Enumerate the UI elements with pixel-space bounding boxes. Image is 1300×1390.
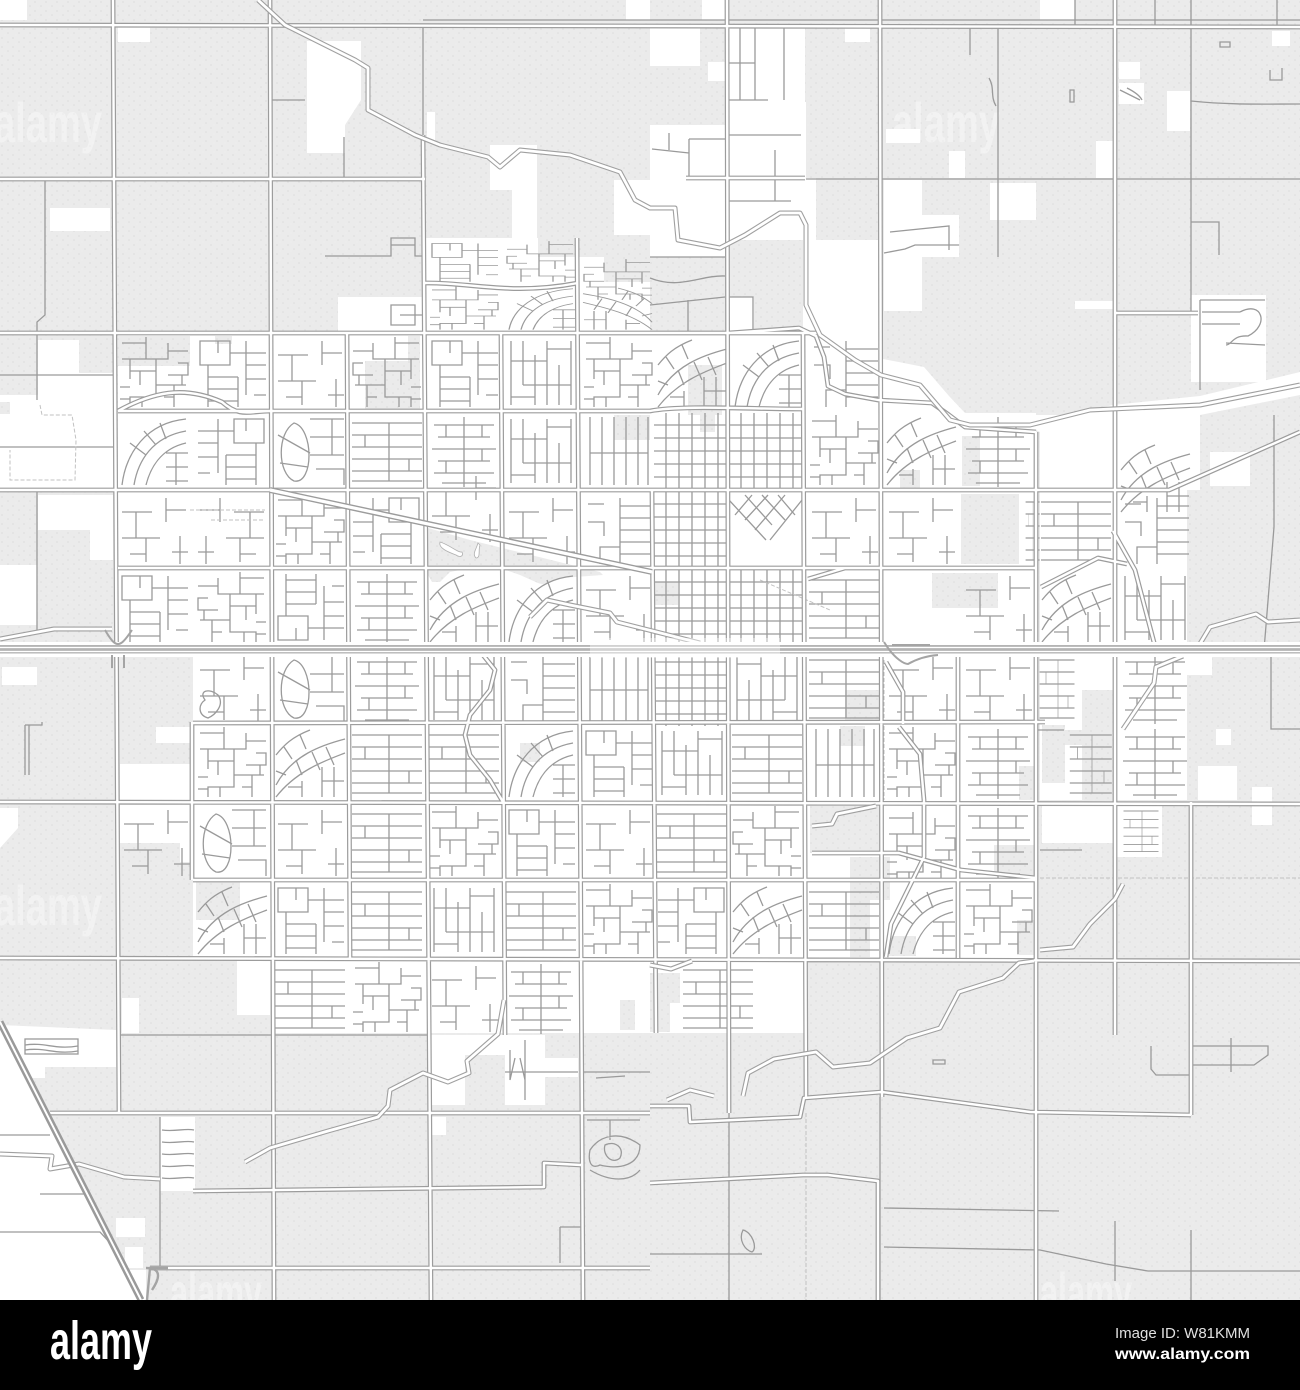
city street rows: [120, 337, 1190, 1034]
footer bar: [0, 1300, 1300, 1390]
railway diagonal: [270, 490, 652, 572]
watermarks: [0, 91, 1132, 1324]
freeway: [0, 630, 1300, 668]
website: www.alamy.com: [1114, 1346, 1250, 1363]
watermarks: alamy: [892, 91, 1000, 154]
south-west highway: [0, 1022, 168, 1300]
downtown diamond grid: [729, 495, 802, 540]
logo: alamy: alamy: [50, 1311, 152, 1371]
upper neighbourhood blocks: [430, 241, 652, 330]
watermarks: alamy: [170, 1261, 262, 1324]
lakes in the park: [440, 542, 480, 558]
image id: Image ID: W81KMM: [1115, 1325, 1250, 1342]
grey patches inside the city: [0, 257, 1115, 1032]
watermarks: alamy: [1040, 1261, 1132, 1324]
dashed trails: [10, 405, 1300, 1300]
